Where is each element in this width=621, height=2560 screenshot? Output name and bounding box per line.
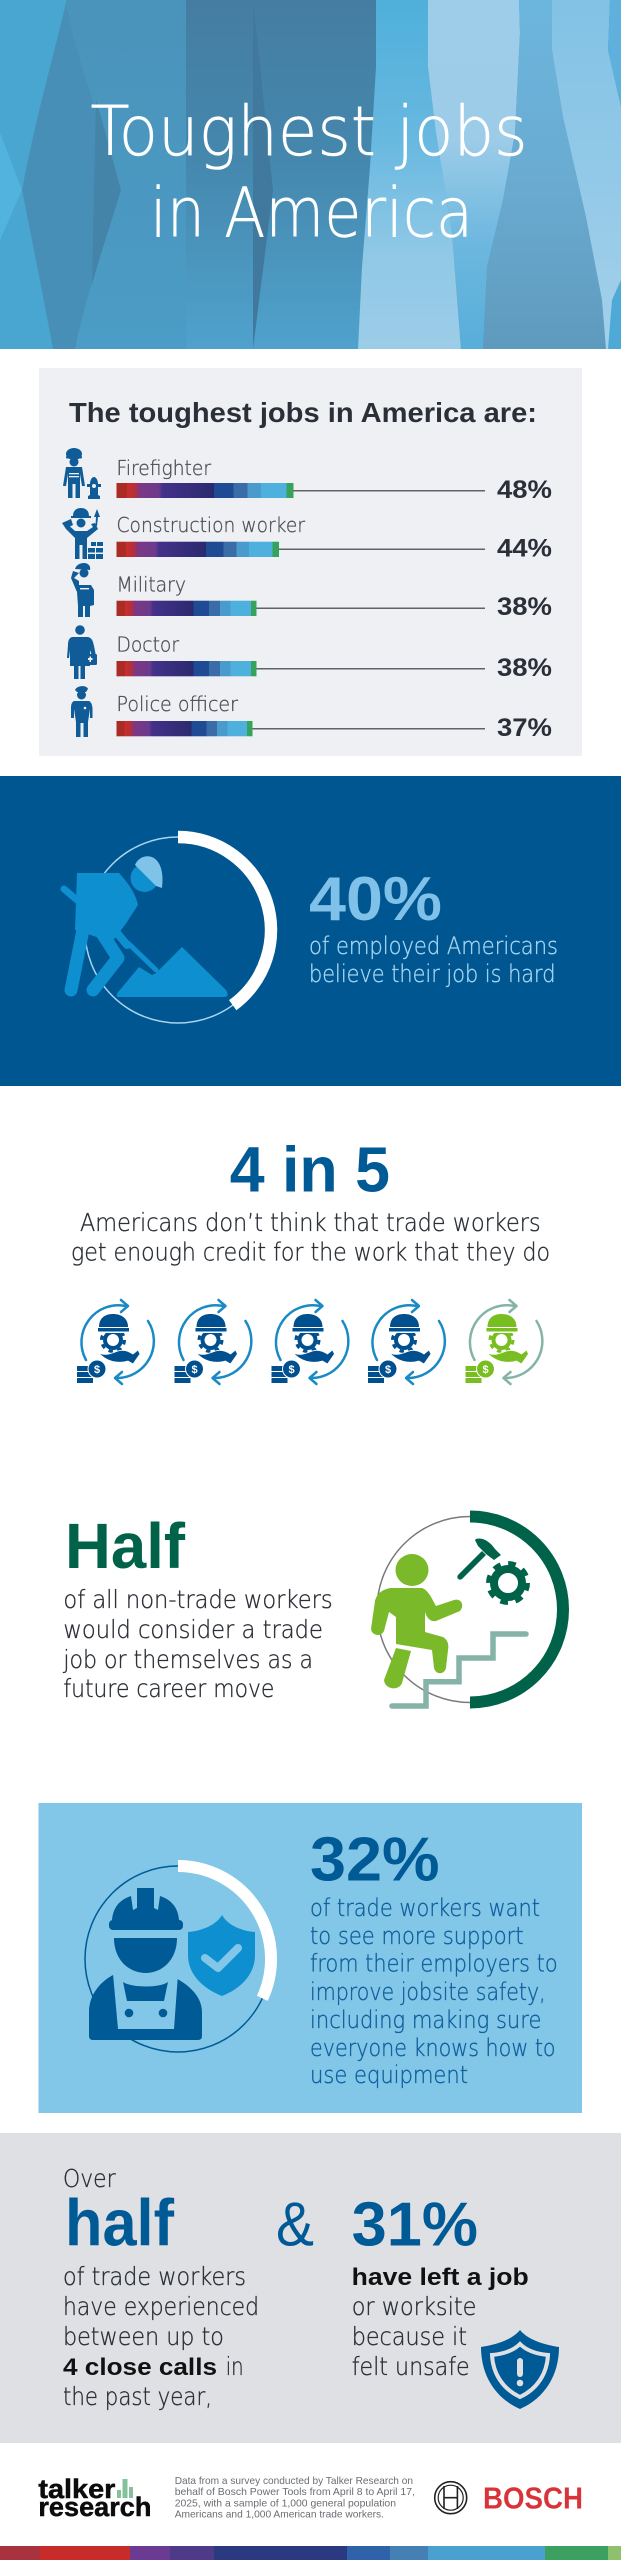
- title: in America: [150, 174, 473, 254]
- stat text: of all non-trade workers: [63, 1585, 333, 1614]
- stat text: to see more support: [310, 1922, 524, 1950]
- icon: warning shield: [481, 2330, 559, 2409]
- icon: hammer: [457, 1539, 501, 1580]
- icon: gear: [488, 1564, 528, 1602]
- text: close calls: have experienced: [63, 2292, 259, 2321]
- source note: [175, 2475, 415, 2520]
- panel: close calls stats: [0, 2133, 621, 2443]
- text: close calls: 4 close calls: [63, 2354, 217, 2381]
- stat: 40%: 40%: [309, 865, 442, 934]
- stat text: would consider a trade: [63, 1615, 323, 1644]
- icon: safety worker: [89, 1888, 202, 2040]
- section: 4 in 5: [71, 1134, 550, 1384]
- stat: Half: Half: [65, 1510, 186, 1582]
- icon: trade worker 5 highlighted green: [466, 1300, 542, 1384]
- icon: trade worker 4: $: [385, 1364, 391, 1376]
- icon: trade worker 1: [77, 1300, 154, 1384]
- label: police officer: Police officer: [116, 692, 239, 716]
- row: military: [71, 563, 552, 621]
- value: 44%: 44%: [497, 535, 552, 563]
- stat text: use equipment: [310, 2061, 468, 2089]
- label: military: Military: [116, 573, 186, 597]
- row: police officer: [71, 686, 552, 742]
- logo: talker research: [38, 2474, 151, 2522]
- icon: trade worker 2: $: [191, 1364, 198, 1376]
- value: 38%: 38%: [497, 593, 552, 621]
- stat text: Americans don’t think that trade workers: [80, 1208, 541, 1237]
- text: left a job: felt unsafe: [352, 2352, 470, 2381]
- label: construction worker: Construction worker: [116, 513, 306, 537]
- stat text: everyone knows how to: [310, 2034, 556, 2062]
- panel: toughest jobs chart: [39, 368, 582, 756]
- icon: trade worker 3: [272, 1300, 348, 1384]
- icon: doctor: [67, 625, 97, 679]
- ampersand: &: [276, 2191, 314, 2260]
- source note: 2025, with a sample of 1,000 general population: [175, 2497, 396, 2509]
- icon: trade worker 1: $: [94, 1364, 100, 1376]
- stat text: job or themselves as a: [63, 1645, 313, 1674]
- icon: stairs: [392, 1634, 526, 1706]
- logo: talker research: talker: [38, 2474, 116, 2504]
- text: Over: Over: [63, 2164, 116, 2193]
- bar: 48%: [116, 483, 485, 498]
- source note: behalf of Bosch Power Tools from April 8 to April 17,: [175, 2486, 415, 2498]
- stat text: get enough credit for the work that they do: [71, 1238, 550, 1267]
- stat text: [310, 1894, 558, 2089]
- row: construction worker: [62, 508, 552, 563]
- logo: Bosch: [435, 2481, 583, 2516]
- stat text: [71, 1208, 550, 1267]
- icon: military: [71, 563, 94, 617]
- source note: Americans and 1,000 American trade workers.: [175, 2508, 384, 2520]
- stat text: [309, 932, 558, 988]
- stat text: improve jobsite safety,: [310, 1978, 546, 2006]
- text: left a job: because it: [352, 2322, 467, 2351]
- stat: 4 in 5: 4 in 5: [230, 1134, 390, 1206]
- panel: header banner: [0, 0, 621, 349]
- icon: police officer: [71, 686, 92, 737]
- title: Toughest jobs: [90, 92, 528, 172]
- text: close calls: the past year,: [63, 2382, 212, 2411]
- bar: 38%: [116, 601, 485, 616]
- label: firefighter: Firefighter: [116, 456, 212, 480]
- stat: 31%: 31%: [352, 2191, 478, 2260]
- value: 48%: 48%: [497, 476, 552, 504]
- stat text: future career move: [63, 1674, 274, 1703]
- title: [90, 92, 528, 254]
- text: close calls: between up to: [63, 2322, 224, 2351]
- color strip: [0, 2546, 621, 2560]
- progress ring: half: [377, 1516, 563, 1702]
- icon row: five trade workers: [77, 1300, 542, 1384]
- stat text: of employed Americans: [309, 932, 558, 960]
- icon: firefighter: [63, 448, 101, 499]
- value: 38%: 38%: [497, 654, 552, 682]
- row: doctor: [67, 625, 552, 682]
- icon: trade worker 4: [368, 1300, 445, 1384]
- stat: 32%: 32%: [310, 1826, 440, 1895]
- text: close calls: [63, 2262, 259, 2411]
- section: half of non-trade workers: [63, 1510, 563, 1706]
- footer: [38, 2474, 583, 2522]
- logo: talker research: research: [38, 2492, 151, 2522]
- value: 37%: 37%: [497, 714, 552, 742]
- icon: trade worker 5 highlighted green: $: [482, 1364, 489, 1376]
- stat text: [63, 1585, 333, 1703]
- icon: person climbing: [371, 1554, 462, 1688]
- icon: trade worker 3: $: [288, 1364, 295, 1376]
- label: doctor: Doctor: [116, 633, 180, 657]
- text: close calls: of trade workers: [63, 2262, 246, 2291]
- progress ring: 40%: [85, 837, 271, 1023]
- stat text: from their employers to: [310, 1950, 558, 1978]
- panel: 32% safety stat: [38, 1803, 582, 2113]
- logo: Bosch: BOSCH: [483, 2481, 583, 2516]
- stat text: including making sure: [310, 2006, 541, 2034]
- panel: 40% hard job stat: [0, 776, 621, 1086]
- source note: Data from a survey conducted by Talker Research on: [175, 2475, 413, 2487]
- stat text: believe their job is hard: [309, 960, 556, 988]
- stat: half: half: [65, 2186, 175, 2260]
- icon: worker shoveling: [64, 856, 228, 997]
- stat text: of trade workers want: [310, 1894, 540, 1922]
- chart heading: The toughest jobs in America are:: [69, 397, 537, 428]
- row: firefighter: [63, 448, 552, 504]
- text: close calls: in: [226, 2352, 244, 2381]
- text: left a job: have left a job: [352, 2264, 529, 2291]
- bar: 37%: [116, 721, 485, 736]
- bar: 38%: [116, 661, 485, 676]
- text: left a job: [352, 2264, 529, 2381]
- text: left a job: or worksite: [352, 2292, 476, 2321]
- icon: trade worker 2: [174, 1300, 251, 1384]
- bar: 44%: [116, 542, 485, 557]
- icon: construction worker: [62, 508, 103, 559]
- icon: check shield: [188, 1915, 255, 1996]
- progress ring: 32%: [85, 1866, 271, 2052]
